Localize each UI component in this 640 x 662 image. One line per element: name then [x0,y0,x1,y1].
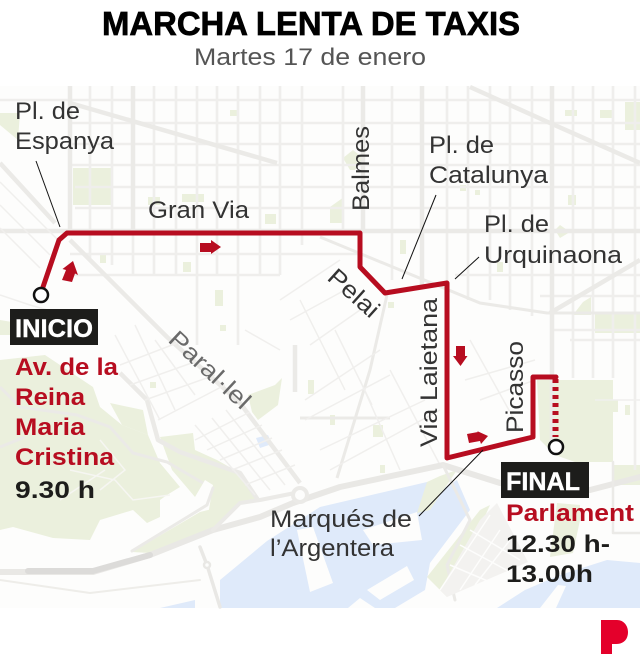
label: Pl. de Urquinaona: Urquinaona [484,242,623,269]
label: Marqués de l'Argentera: l’Argentera [270,535,395,562]
label: Pl. de Espanya [15,98,115,155]
label: Pl. de Espanya: Espanya [15,128,115,155]
streets: main avenues [0,86,640,500]
label: Pelai: Pelai [322,263,385,324]
green: parks [0,102,640,597]
label: Picasso: Picasso [502,341,529,433]
logo [601,620,628,654]
arrow: Gran Via [200,240,221,254]
streets: old town network [0,182,640,495]
start details: 9.30 h [15,477,95,504]
title: MARCHA LENTA DE TAXIS [102,5,520,42]
start details: Maria [15,414,86,441]
end details: 13.00h [506,561,593,588]
leader lines [36,161,483,516]
streets: Montjuic roads [60,440,170,500]
end details [506,500,634,588]
piers [297,512,566,608]
badge: FINAL [501,462,589,498]
streets: eixample grid [0,86,640,470]
start details: Av. de la [15,354,119,381]
label: Gran Via: Gran Via [148,197,250,224]
label: Marqués de l'Argentera: Marqués de [270,506,412,533]
end details: Parlament [506,500,634,527]
label: Pl. de Espanya: Pl. de [15,98,80,125]
start details [15,354,119,504]
label: Marqués de l'Argentera [270,506,412,562]
start details: Cristina [15,444,115,471]
start marker [34,288,48,302]
end details: 12.30 h- [506,531,610,558]
subtitle: Martes 17 de enero [194,44,426,71]
arrow: Av. Reina Maria Cristina [62,261,78,282]
badge: INICIO: INICIO [15,315,93,343]
badge: FINAL: FINAL [506,468,580,496]
label: Via Laietana: Via Laietana [416,297,443,447]
label: Pl. de Catalunya: Catalunya [429,162,549,189]
water: port [160,406,640,608]
label: Paral·lel: Paral·lel [163,326,256,415]
arrow: Marqués de l'Argentera [467,431,488,444]
label: Pl. de Urquinaona: Pl. de [484,211,549,238]
streets: ronda litoral [0,462,640,607]
arrow: Via Laietana [453,346,468,366]
end marker [549,440,563,454]
badge: INICIO [10,309,98,345]
label: Pl. de Catalunya: Pl. de [429,132,494,159]
label: Pl. de Urquinaona [484,211,623,269]
base map [0,86,640,608]
streets: barceloneta [440,503,528,597]
start details: Reina [15,384,86,411]
route line [43,233,556,458]
label: Balmes: Balmes [348,126,375,211]
final dotted section [552,379,558,437]
direction arrows [62,240,488,444]
label: Pl. de Catalunya [429,132,549,189]
